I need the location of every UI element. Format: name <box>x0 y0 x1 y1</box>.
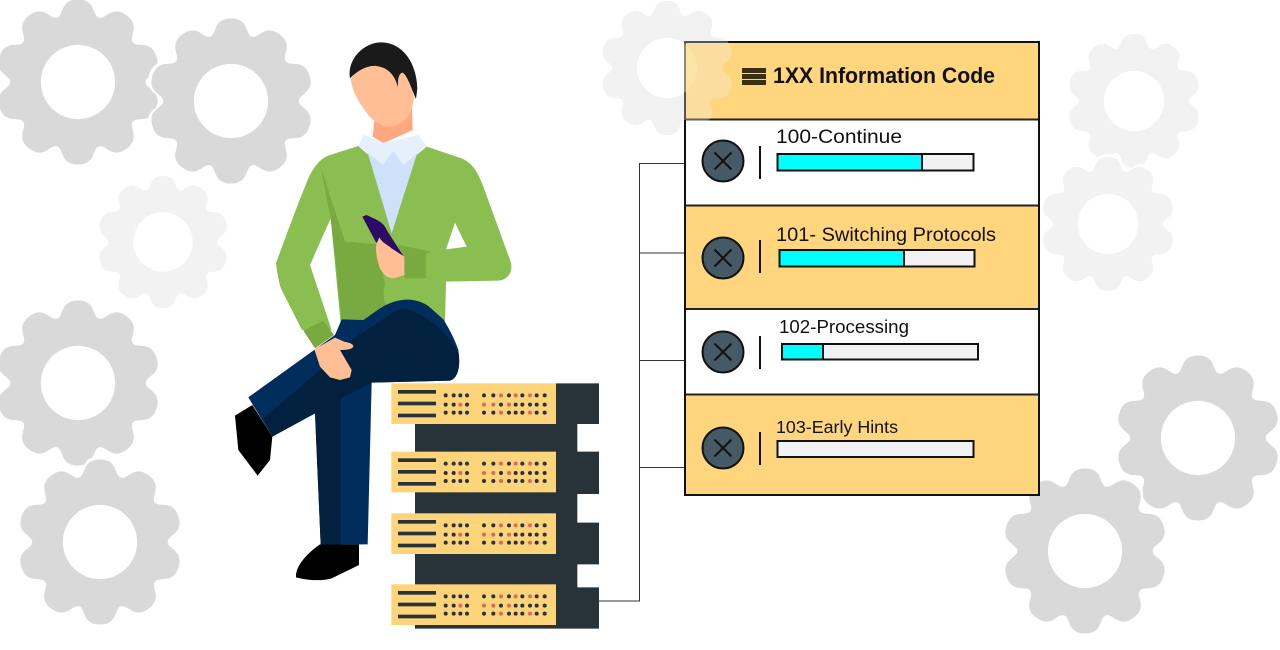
collar <box>358 135 427 165</box>
heading: 1XX Information Code <box>773 63 995 88</box>
person: lower body <box>235 300 459 580</box>
trouser shade <box>263 308 459 544</box>
face <box>351 66 414 127</box>
hand <box>376 237 404 278</box>
shirt <box>367 152 418 238</box>
hand on knee <box>314 338 353 380</box>
cuff <box>398 245 432 278</box>
row: header background <box>686 43 1038 119</box>
panel: 1XX information code <box>684 41 1040 496</box>
server rack body <box>415 383 599 629</box>
server rack <box>391 383 599 629</box>
phone <box>362 215 403 256</box>
left shoe <box>235 405 272 476</box>
row: 100-Continue <box>702 126 974 182</box>
row: 102-Processing: 102-Processing <box>779 317 909 337</box>
row: 100-Continue: 100-Continue <box>776 126 902 148</box>
sweater <box>276 146 511 330</box>
icon: menu bars <box>742 68 766 85</box>
connector lines <box>599 164 685 601</box>
sleeve cuff <box>303 321 334 348</box>
trousers <box>248 300 459 544</box>
right shoe <box>296 544 359 580</box>
gear overlay on header <box>684 41 732 120</box>
row: 103-Early Hints: 103-Early Hints <box>776 417 898 437</box>
row: 101-Switching Protocols: 101- Switching Protocols <box>776 224 996 246</box>
row: 101-Switching Protocols <box>702 224 996 278</box>
person: upper body <box>276 42 511 330</box>
neck <box>373 108 413 143</box>
sweater shade <box>321 167 387 320</box>
row: 102-Processing <box>702 317 978 372</box>
row: 103-Early Hints <box>702 417 974 468</box>
hair <box>350 42 417 99</box>
arm gap <box>446 223 467 249</box>
